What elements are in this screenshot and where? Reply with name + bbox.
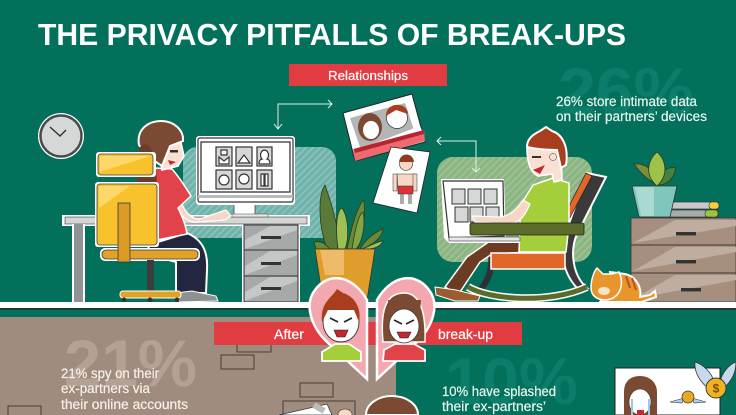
- heading: Relationships: [289, 64, 447, 86]
- office chair: [95, 152, 200, 302]
- stat: 21%: ex-partners via: [61, 381, 150, 396]
- stat: 10%: their ex-partners’: [442, 399, 546, 414]
- icon: wall clock: [38, 113, 84, 159]
- hatched panel: monitor backdrop: [183, 147, 336, 238]
- stat: 10%: 10% have splashed: [442, 384, 556, 399]
- panel: brown wall: [0, 317, 396, 415]
- stat: 21%: their online accounts: [61, 397, 188, 412]
- icon: small winged coin: [670, 391, 706, 403]
- stat: 26%: 26%: [558, 54, 694, 128]
- potted plant on floor: [314, 185, 383, 300]
- person: woman at the desk: [137, 121, 231, 302]
- photo: couple in bed: [343, 94, 425, 161]
- stat: 26%: 26% store intimate data: [556, 94, 697, 109]
- photo card: crying woman and flying money: [615, 362, 736, 415]
- title: THE PRIVACY PITFALLS OF BREAK-UPS: [38, 17, 626, 52]
- bricks: [8, 340, 355, 415]
- computer monitor: [196, 136, 295, 217]
- heading: Relationships: Relationships: [328, 68, 409, 83]
- cabinet: [631, 218, 736, 302]
- floor line: [0, 302, 736, 308]
- paper note and hand: [279, 402, 352, 415]
- banner: After break-up: After: [274, 327, 305, 342]
- heart half: angry man: [310, 278, 367, 379]
- desk: [62, 215, 310, 302]
- arrow: tablet to photos: [437, 137, 480, 172]
- man's arm: [472, 200, 530, 224]
- heart half: angry woman: [377, 278, 434, 379]
- man's legs: [445, 241, 530, 295]
- stat: 21%: 21%: [64, 326, 197, 400]
- arrow: monitor to photos: [274, 100, 332, 129]
- icon: large winged coin: $: [713, 382, 720, 396]
- icon grid: gallery thumbnails: [216, 147, 272, 189]
- books: [670, 202, 719, 217]
- rocking chair and man: [435, 127, 606, 301]
- banner: After break-up: [214, 322, 522, 345]
- cat: [591, 268, 656, 302]
- tablet: [441, 179, 520, 243]
- banner: After break-up: break-up: [438, 327, 493, 342]
- hatched panel: tablet backdrop: [437, 157, 592, 262]
- man's torso: [519, 178, 569, 252]
- head at bottom centre: [366, 396, 418, 415]
- stat: 21%: 21% spy on their: [61, 366, 159, 381]
- stat: 26%: on their partners’ devices: [556, 109, 707, 124]
- potted plant on cabinet: [632, 152, 677, 217]
- photo: man in underwear: [373, 147, 430, 213]
- man's head: [527, 140, 562, 182]
